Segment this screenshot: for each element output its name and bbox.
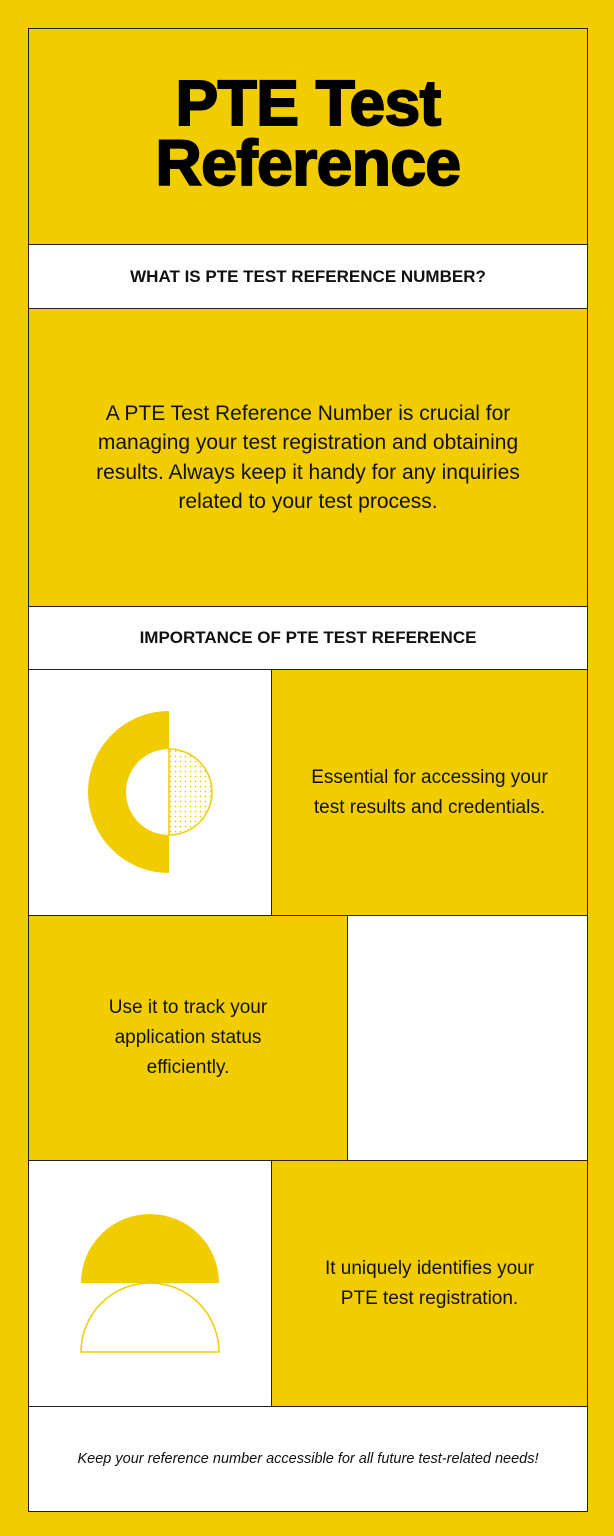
text block: definition bbox=[28, 308, 588, 607]
icon: half ring and dotted circle bbox=[88, 711, 213, 873]
text block: point 2: Use it to track your application status efficiently. bbox=[109, 997, 267, 1078]
title: Reference bbox=[156, 126, 460, 198]
text block: point 2 bbox=[28, 915, 348, 1161]
text block: point 1 bbox=[271, 669, 588, 916]
text block: point 3: It uniquely identifies your PTE test registration. bbox=[325, 1258, 534, 1308]
text block: point 3 bbox=[271, 1160, 588, 1407]
title: PTE Test bbox=[175, 66, 441, 138]
text block: definition: A PTE Test Reference Number is crucial for managing your test registration and obtaining results. Always keep it handy for any inquiries related to your test process. bbox=[96, 402, 520, 513]
heading: what is: WHAT IS PTE TEST REFERENCE NUMBER? bbox=[130, 266, 486, 286]
panel: icon 2 bbox=[28, 1160, 272, 1407]
footer: Keep your reference number accessible for all future test-related needs! bbox=[77, 1451, 539, 1467]
footer bbox=[28, 1406, 588, 1512]
panel: icon 1 bbox=[28, 669, 272, 916]
text block: point 1: Essential for accessing your test results and credentials. bbox=[311, 766, 548, 818]
panel: blank white bbox=[347, 915, 588, 1161]
heading: importance: IMPORTANCE OF PTE TEST REFERENCE bbox=[140, 628, 476, 647]
heading: importance bbox=[28, 606, 588, 670]
title panel bbox=[28, 28, 588, 245]
title bbox=[156, 66, 460, 198]
icon: semicircles bbox=[80, 1214, 220, 1353]
heading: what is bbox=[28, 244, 588, 309]
